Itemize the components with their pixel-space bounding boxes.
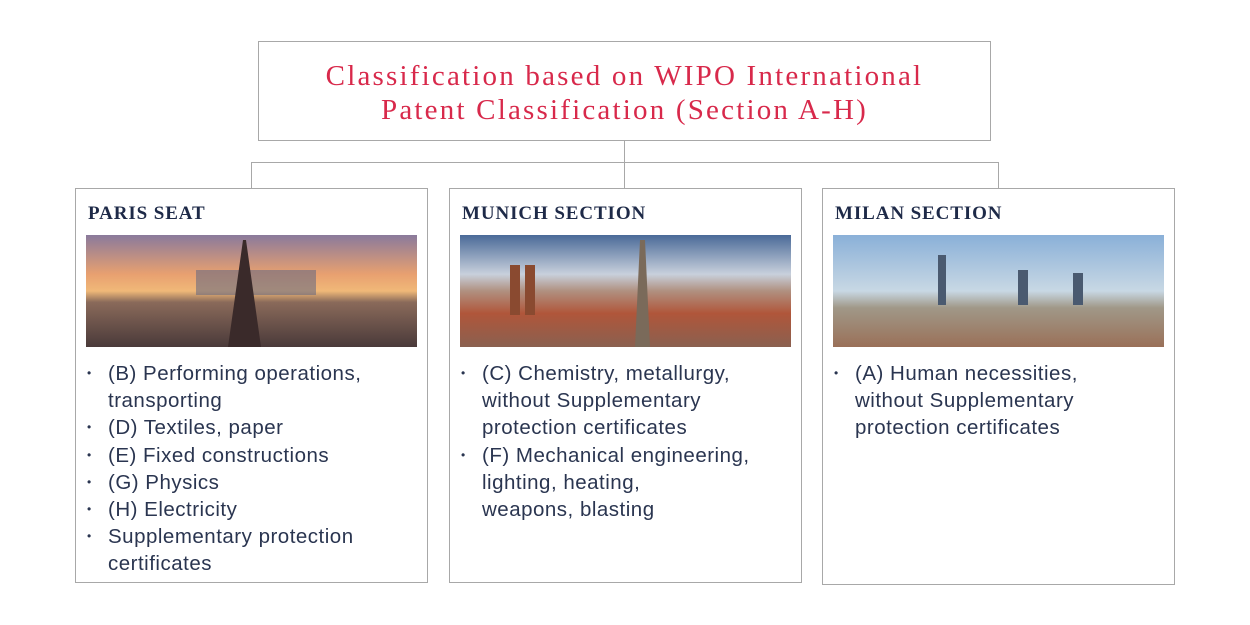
bullet list: Munich: lighting, heating, [482,471,640,494]
heading: Munich: MUNICH SECTION [462,203,646,224]
panel: Milan [822,188,1175,585]
title box: Classification based on WIPO International [326,60,923,92]
photo: Paris skyline [86,235,417,347]
bullet list: Paris: (E) Fixed constructions [108,444,329,467]
bullet list: Paris: (B) Performing operations, transporting [108,362,361,412]
bullet list: Munich: weapons, blasting [482,498,655,521]
photo: Milan skyline [833,235,1164,347]
heading: Milan: MILAN SECTION [835,203,1002,224]
bullet list: Milan [834,362,1078,439]
heading: Paris: PARIS SEAT [88,203,206,224]
title box: Patent Classification (Section A-H) [381,94,868,126]
connector lines [251,141,999,188]
photo: Munich skyline [460,235,791,347]
title box [258,41,991,141]
bullet list: Paris: Supplementary protection certificates [108,525,354,575]
bullet list: Paris [88,362,361,575]
panel: Paris [75,188,428,583]
bullet list: Munich: protection certificates [482,416,687,439]
bullet list: Milan: protection certificates [855,416,1060,439]
bullet list: Paris: (D) Textiles, paper [108,416,283,439]
bullet list: Milan: (A) Human necessities, [855,362,1078,385]
bullet list: Munich: (C) Chemistry, metallurgy, [482,362,730,385]
bullet list: Munich [462,362,750,521]
bullet list: Milan: without Supplementary [855,389,1074,412]
bullet list: Munich: without Supplementary [482,389,701,412]
bullet list: Paris: (G) Physics [108,471,219,494]
bullet list: Paris: (H) Electricity [108,498,237,521]
panel: Munich [449,188,802,583]
bullet list: Munich: (F) Mechanical engineering, [482,444,750,467]
